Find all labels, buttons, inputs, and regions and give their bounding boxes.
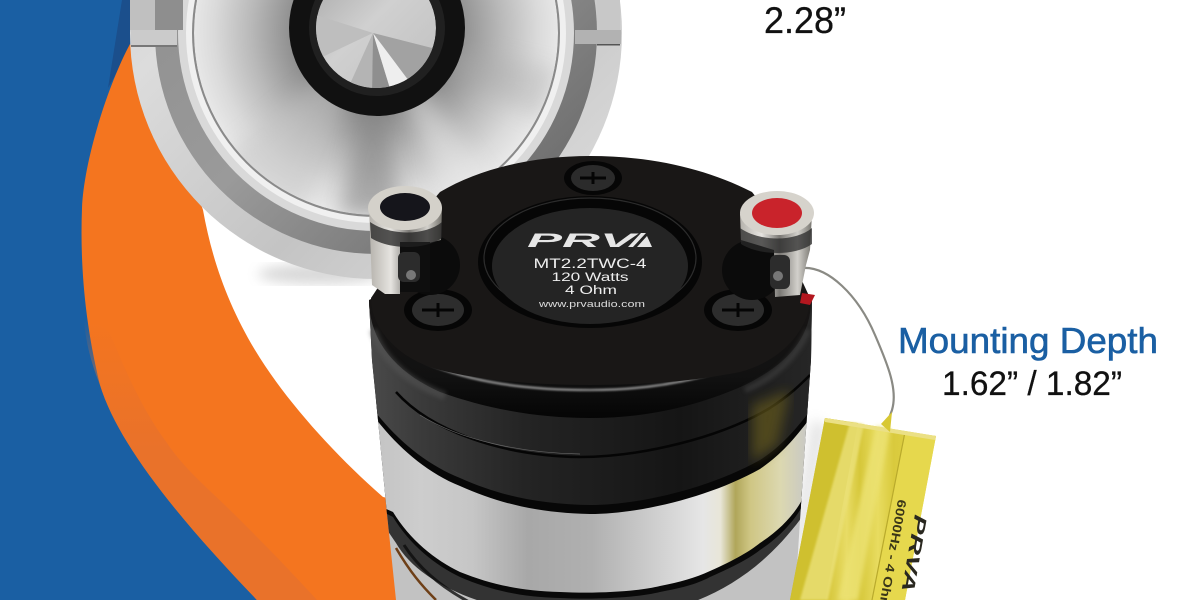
horn inner cone [194, 0, 560, 215]
horn tweeter flare [130, 0, 622, 279]
horn grey band [155, 0, 597, 254]
top plate [371, 156, 810, 385]
lip side highlights [373, 330, 445, 396]
url text: www.prvaudio.com [538, 299, 645, 310]
groove line [396, 375, 810, 457]
model text: MT2.2TWC-4 [534, 256, 647, 271]
dark surround [289, 0, 465, 116]
capacitor rating: 6000Hz - 4 Ohm [876, 498, 909, 600]
right terminal [722, 191, 815, 305]
yellow capacitor [790, 412, 936, 600]
soft shadow beside driver [785, 420, 826, 600]
background: blue swoosh [0, 0, 257, 600]
capacitor logo: PRVA [898, 513, 931, 594]
logo PRV: PRV [527, 231, 639, 252]
lip highlight [425, 354, 762, 390]
top lip [369, 270, 811, 418]
upper black section [360, 290, 820, 514]
horn outer rim [130, 0, 622, 279]
wire lead [802, 268, 894, 424]
left terminal [368, 186, 460, 295]
label recess [478, 196, 702, 328]
phase plug [316, 0, 436, 88]
silver band [360, 400, 820, 593]
background: dark blue strip [108, 0, 134, 88]
tweeter driver body [360, 156, 820, 600]
left screw [404, 289, 472, 331]
watts text: 120 Watts [552, 272, 629, 284]
silver band shadow [360, 400, 820, 599]
right screw [704, 289, 772, 331]
lowest silver base [384, 491, 801, 600]
label disc [492, 208, 688, 324]
lower black ring [370, 490, 820, 600]
left notch tab [130, 0, 183, 47]
logo stripes [628, 233, 652, 247]
spec value: 2.28: 2.28” [764, 0, 846, 41]
shadow under horn [258, 264, 382, 284]
yellow reflection [752, 390, 790, 462]
ohm text: 4 Ohm [565, 285, 617, 297]
background: orange swoosh [82, 44, 420, 600]
spec label: mounting depth: Mounting Depth [898, 320, 1158, 361]
spec value: depth: 1.62” / 1.82” [942, 365, 1122, 403]
top screw [564, 161, 622, 195]
right notch tab [575, 0, 621, 46]
